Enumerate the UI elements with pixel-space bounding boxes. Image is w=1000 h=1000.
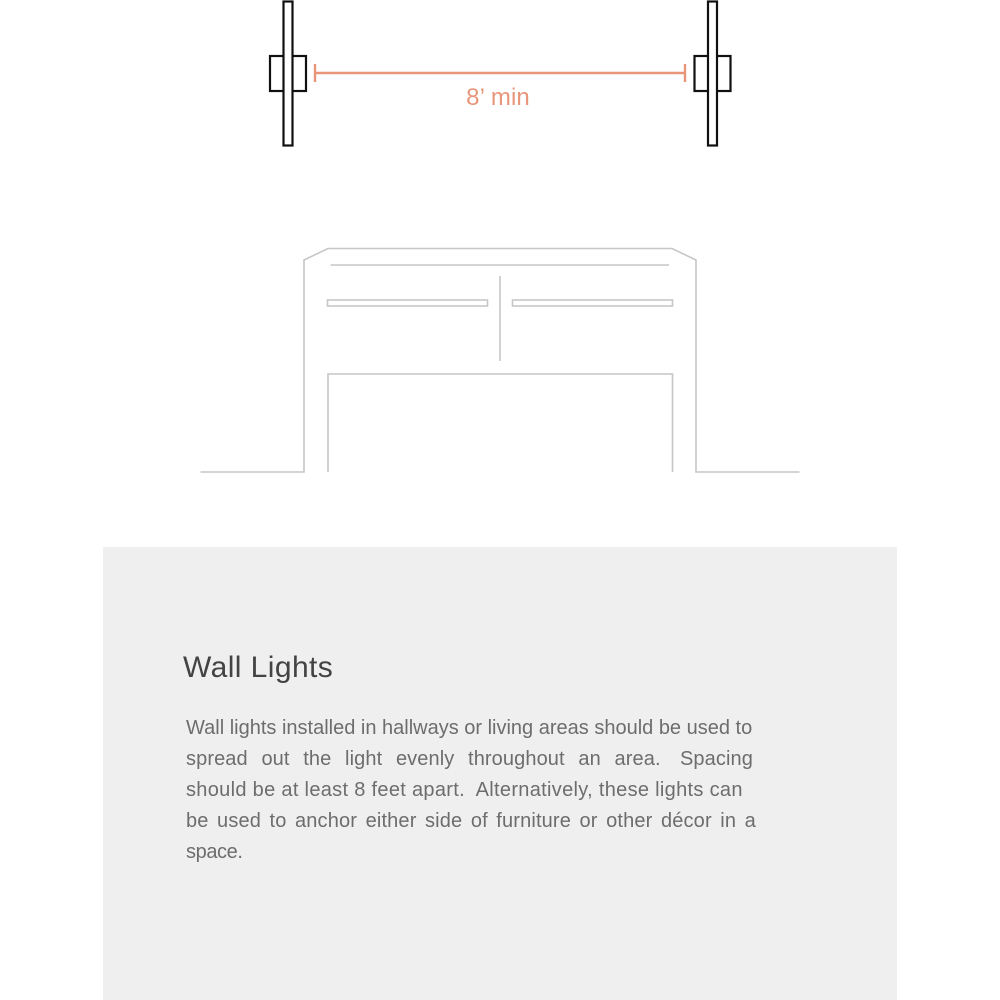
text block: used	[217, 810, 261, 832]
icon: left wall light	[270, 2, 306, 146]
diagram: wall light spacing	[200, 0, 800, 473]
text block: other	[606, 810, 652, 832]
furniture outline	[200, 248, 800, 472]
text block: of	[471, 810, 488, 832]
text block: should be at least 8 feet apart. Alternatively, these lights can	[186, 779, 743, 801]
text block: evenly	[396, 748, 454, 770]
text block: space.	[186, 841, 243, 863]
text block: side	[425, 810, 462, 832]
text block: spread	[186, 748, 248, 770]
text block: an	[578, 748, 601, 770]
text block: or	[580, 810, 598, 832]
icon: right wall light	[694, 2, 730, 146]
text block: Spacing	[680, 748, 753, 770]
text block: out	[261, 748, 290, 770]
text block: throughout	[468, 748, 565, 770]
panel: wall lights description	[103, 547, 897, 1000]
text block: décor	[661, 810, 712, 832]
text block: light	[345, 748, 382, 770]
text block: a	[745, 810, 756, 832]
text block: to	[270, 810, 287, 832]
text block: area.	[615, 748, 661, 770]
dimension label: 8’ min	[466, 84, 530, 111]
text block: the	[303, 748, 331, 770]
text block: Wall lights installed in hallways or living areas should be used to	[186, 717, 752, 739]
heading: Wall Lights	[183, 651, 333, 684]
text block: furniture	[496, 810, 571, 832]
text block: anchor	[295, 810, 357, 832]
arrow: 8 foot minimum dimension line	[315, 64, 685, 82]
text block: be	[186, 810, 209, 832]
text block: either	[366, 810, 417, 832]
text block: in	[720, 810, 736, 832]
